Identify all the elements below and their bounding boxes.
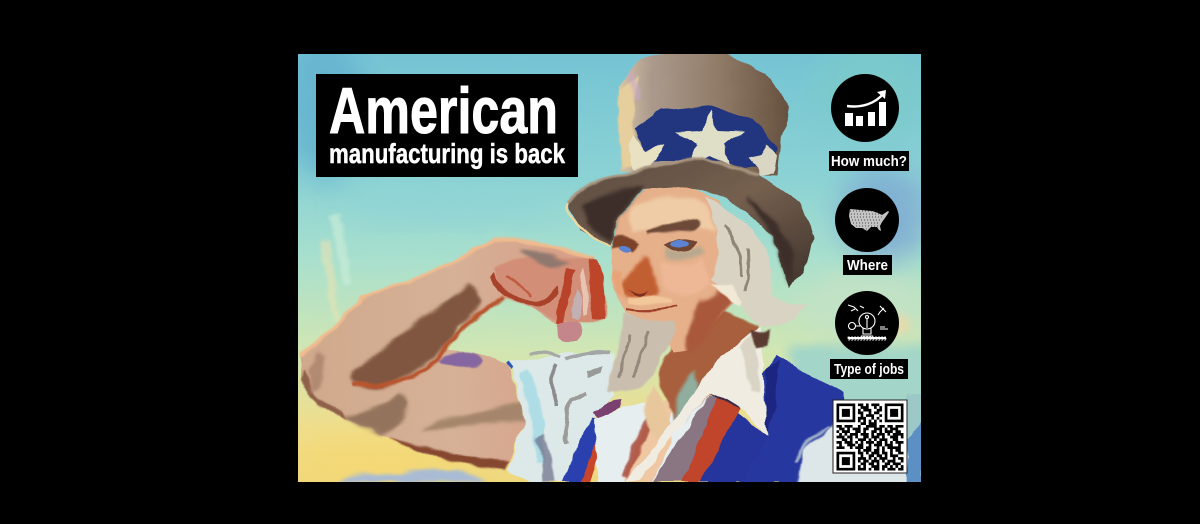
painted sky — [298, 54, 921, 482]
flexed arm — [300, 238, 608, 470]
top hat — [567, 54, 813, 288]
title block — [316, 74, 578, 177]
hat band with stars — [628, 105, 777, 176]
hat crown — [617, 54, 790, 176]
title: American: American — [329, 74, 558, 147]
face — [612, 186, 745, 354]
shirt and chest — [594, 395, 710, 482]
right vest — [752, 355, 921, 482]
white collar — [625, 325, 767, 482]
icon: growth chart — [831, 74, 899, 142]
label: Type of jobs: Type of jobs — [834, 361, 904, 378]
painting: Uncle Sam flexing — [298, 54, 921, 482]
subtitle: manufacturing is back — [329, 138, 565, 169]
neck — [643, 310, 759, 440]
fist — [491, 248, 608, 342]
hat brim — [567, 158, 813, 288]
left vest and red strap — [563, 399, 622, 482]
icon: light bulb and tools — [835, 291, 899, 355]
QR code — [833, 400, 907, 473]
white hair — [707, 197, 807, 348]
label: How much?: How much? — [831, 153, 907, 170]
label: Where: Where — [847, 257, 888, 274]
left shirt sleeve — [508, 352, 614, 482]
goatee — [609, 312, 674, 392]
center vest, lapel and red strap — [653, 393, 768, 482]
icon: dotted US map — [835, 188, 899, 252]
